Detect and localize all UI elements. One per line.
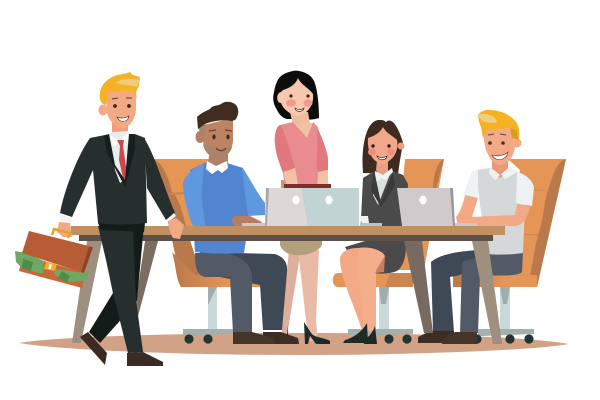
table legs: back xyxy=(136,241,158,320)
waistband shadow xyxy=(98,223,145,232)
laptop right base xyxy=(454,223,477,226)
front shoe xyxy=(127,352,163,366)
sweater xyxy=(190,162,250,254)
laptop right xyxy=(397,188,454,226)
lapels xyxy=(104,134,135,187)
pants far xyxy=(431,250,485,332)
pants near xyxy=(460,252,523,333)
pants: near leg xyxy=(195,253,252,333)
hair xyxy=(100,72,140,105)
neck xyxy=(112,122,128,142)
heels xyxy=(304,322,330,344)
collar xyxy=(206,161,228,174)
neck xyxy=(208,150,228,170)
arms xyxy=(456,195,530,226)
table top xyxy=(71,226,505,241)
lid xyxy=(22,231,93,273)
chair: middle xyxy=(333,159,444,344)
lock xyxy=(44,262,57,271)
person: seated blond man xyxy=(418,110,534,344)
neck xyxy=(290,112,310,138)
belt xyxy=(284,184,331,189)
right arm xyxy=(144,138,175,220)
jacket xyxy=(90,134,147,224)
table legs: front xyxy=(72,241,502,344)
person: standing woman xyxy=(273,71,331,344)
arms xyxy=(283,168,299,190)
head xyxy=(483,125,515,165)
laptop left base xyxy=(242,223,268,226)
vest xyxy=(476,168,525,255)
pants: far leg xyxy=(200,252,287,330)
laptop teal xyxy=(302,188,359,226)
tie xyxy=(117,140,127,182)
chair: left xyxy=(153,159,265,344)
face xyxy=(277,78,313,116)
hair xyxy=(478,110,519,140)
hand xyxy=(232,216,262,226)
briefcase xyxy=(15,229,93,288)
case body xyxy=(19,255,86,288)
floor shadow xyxy=(19,333,569,355)
shoes xyxy=(263,332,299,344)
handle xyxy=(52,229,70,238)
money right xyxy=(54,269,90,282)
head xyxy=(106,90,136,128)
blazer xyxy=(360,170,408,240)
hair xyxy=(273,71,319,120)
laptops xyxy=(242,188,477,226)
neck and collar xyxy=(376,160,388,178)
sleeves xyxy=(463,170,478,198)
front leg xyxy=(98,226,143,353)
legs xyxy=(282,250,300,340)
face xyxy=(368,127,397,164)
heels xyxy=(343,323,368,343)
person: walking man with briefcase xyxy=(15,72,184,366)
laptop left xyxy=(265,188,308,226)
legs xyxy=(340,248,367,331)
skirt xyxy=(280,180,322,255)
left arm xyxy=(60,138,97,217)
back shoe xyxy=(80,332,107,365)
hand xyxy=(360,216,369,225)
right hand xyxy=(168,218,184,239)
neck xyxy=(492,160,508,178)
shoes xyxy=(418,331,454,343)
collar xyxy=(489,166,516,180)
shirt xyxy=(109,131,129,183)
left hand xyxy=(57,222,72,237)
money left xyxy=(15,251,44,274)
person: seated woman in suit xyxy=(340,120,408,344)
hair back xyxy=(363,120,403,174)
back leg xyxy=(89,225,144,343)
chair: right xyxy=(453,159,566,344)
skirt xyxy=(345,241,406,274)
head xyxy=(203,118,233,158)
cuffs xyxy=(60,215,72,223)
blouse xyxy=(279,122,322,186)
person: seated blue sweater man xyxy=(183,102,299,344)
